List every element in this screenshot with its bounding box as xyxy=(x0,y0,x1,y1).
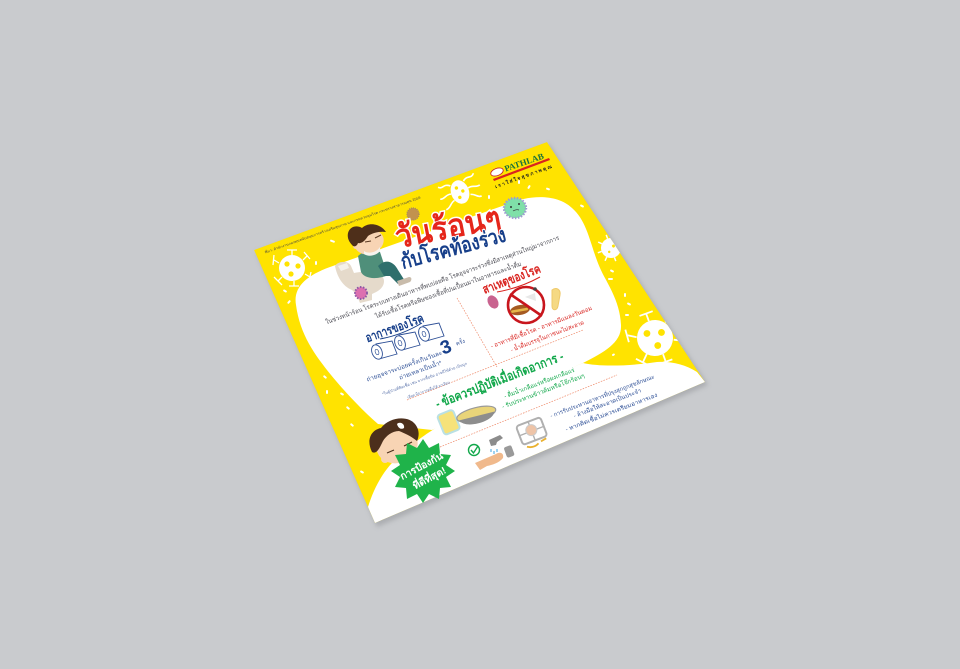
panel: what to do when symptoms appear: - ดื่มน้ำเกลือแร่หรือผงเกลือแร่ xyxy=(502,364,576,400)
poster artwork clipped to sheet xyxy=(254,142,705,523)
icon: glass of drink xyxy=(437,409,460,435)
poster yellow background xyxy=(254,142,705,523)
icon: hand washing xyxy=(475,435,515,470)
badge: prevention: ที่ดีที่สุด! xyxy=(410,463,448,492)
panel: what to do when symptoms appear xyxy=(432,347,586,435)
panel: prevention tips: - ล้างมือให้สะอาดเป็นประจำ xyxy=(572,386,642,420)
mockup scene: tilted poster on grey background xyxy=(254,142,708,527)
icon: kidney germ xyxy=(485,293,501,311)
illustration: sick boy on toilet xyxy=(335,224,411,303)
panel: symptoms: ถ่ายเหลวเป็นน้ำ* xyxy=(397,357,443,382)
panel: what to do when symptoms appear: - ข้อควรปฏิบัติเมื่อเกิดอาการ - xyxy=(432,347,566,412)
panel: symptoms: ครั้ง xyxy=(455,337,466,347)
title: วันร้อนๆ xyxy=(392,199,504,255)
badge: prevention xyxy=(391,439,455,503)
illustration: boy with fever xyxy=(369,418,423,469)
intro text: ได้รับเชื้อโรคหรือพิษของเชื้อที่ปนเปื้อนมาในอาหารและน้ำดื่ม xyxy=(373,259,523,321)
panel: symptoms: อาการของโรค xyxy=(363,310,426,345)
badge: prevention: การป้องกัน xyxy=(398,450,445,483)
panel: causes xyxy=(480,261,593,354)
panel: causes: - อาหารที่มีเชื้อโรค - อาหารมีแมลงวันตอม xyxy=(489,302,593,350)
icon: stove with cooked egg xyxy=(516,417,549,450)
icon: green check xyxy=(468,444,480,456)
panel: symptoms: *ในผู้ป่วยที่ติดเชื้อ เช่น จากเชื้อบิด อาจมีไข้ด้วย เป็นมูก xyxy=(381,360,468,396)
icon: no food sign xyxy=(508,287,544,323)
white central blob xyxy=(296,197,621,430)
logo: Pathlab xyxy=(490,151,553,190)
confetti dashes xyxy=(283,180,631,474)
poster shadow xyxy=(256,144,708,527)
icon: white germ right xyxy=(598,234,620,262)
panel: causes: - น้ำดื่มบรรจุในภาชนะไม่สะอาด xyxy=(509,317,585,354)
logo: Pathlab: PATHLAB xyxy=(503,151,545,174)
icon: white virus right xyxy=(624,310,682,364)
icon: yellow bacterium xyxy=(552,289,560,310)
panel: symptoms: เลือด มีอาการคลื่นไส้ อาเจียน xyxy=(406,379,451,400)
panel: symptoms: 3 xyxy=(438,336,455,360)
panel: what to do when symptoms appear: - รับประทานข้าวต้มหรือโจ๊กร้อนๆ xyxy=(501,372,586,411)
logo: Pathlab: เราใส่ใจสุขภาพคุณ xyxy=(494,163,553,190)
panel: symptoms xyxy=(363,310,468,400)
divider dotted lines xyxy=(407,298,617,447)
icon: brown germ xyxy=(407,208,419,220)
white lower wave panel xyxy=(368,362,705,523)
icon: green germ xyxy=(504,198,526,218)
title: กับโรคท้องร่วง xyxy=(398,222,508,274)
panel: causes: สาเหตุของโรค xyxy=(480,261,543,298)
panel: prevention tips: - การรับประทานอาหารที่ปรุงสุกถูกสุขลักษณะ xyxy=(549,373,656,420)
panel: symptoms: ถ่ายอุจจาระบ่อยครั้งเกินวันละ xyxy=(365,347,443,384)
panel: prevention tips: - หากติดเชื้อไม่ควรเตรียมอาหารเอง xyxy=(564,390,659,433)
icon: pink germ xyxy=(355,287,367,299)
intro text: ในช่วงหน้าร้อน โรคระบบทางเดินอาหารที่พบบ่อยคือ โรคอุจจาระร่วงซึ่งมีสาเหตุส่วนใหญ่มาจากการ xyxy=(324,233,561,326)
icon: white virus top left xyxy=(273,250,311,286)
icon: white germ top xyxy=(436,173,484,210)
icon: soup bowl xyxy=(455,403,498,428)
fine print disclaimer: ที่มา: สำนักงานกองทุนสนับสนุนการสร้างเสริมสุขภาพ และกรมควบคุมโรค กระทรวงสาธารณสุข 2559 xyxy=(264,195,422,255)
